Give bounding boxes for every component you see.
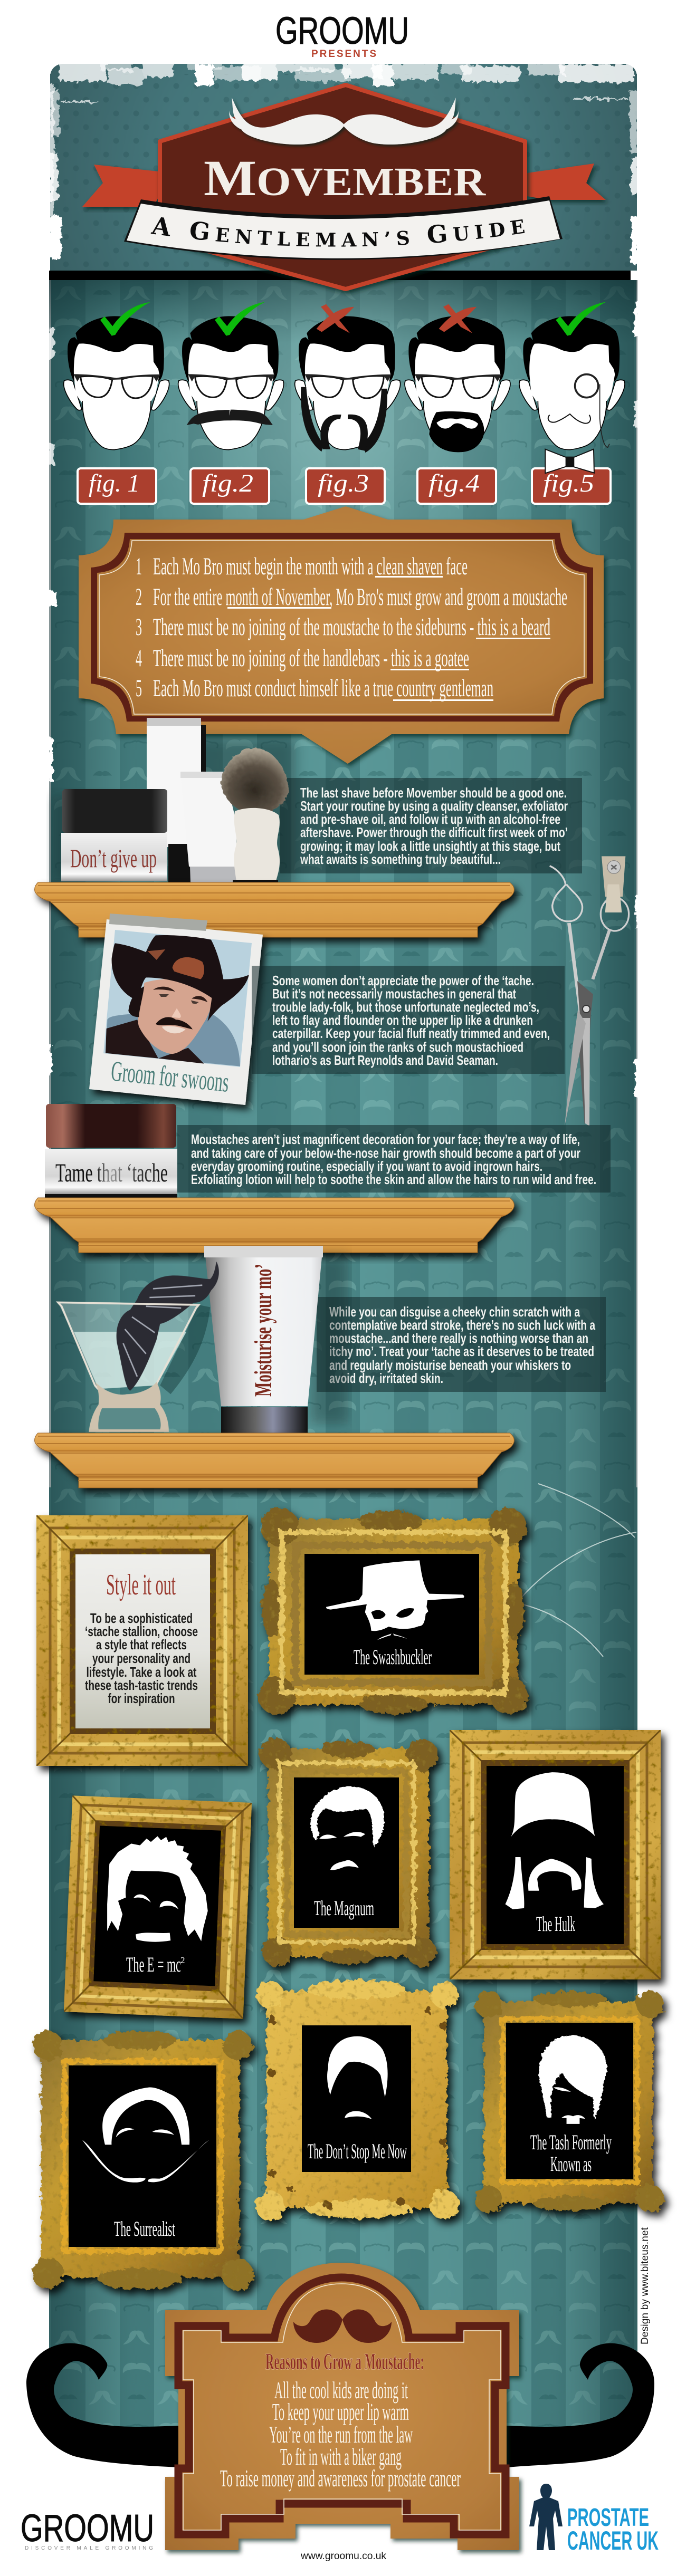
fig 4 face: beard [405,304,510,452]
frame: style it out [36,1515,248,1766]
text panel: tame that tache [177,1125,611,1193]
text panel: don't give up [280,778,582,873]
reasons list: To raise money and awareness for prostate cancer [220,2465,461,2492]
text panel: tame that tache: everyday grooming routine, especially if you want to avoid ingrown hairs. [191,1158,542,1174]
glass with moustache [58,1262,219,1432]
frame: the E = mc2 [64,1795,252,2019]
caption: Groom for swoons [110,1055,231,1098]
jar: tame that tache: Tame that ‘tache [55,1158,168,1187]
intro text: lifestyle. Take a look at [87,1664,197,1680]
shaving brush [220,748,289,883]
caption: Known as [550,2152,592,2176]
frame: the swashbuckler: The Swashbuckler [354,1645,432,1669]
credit: design by: Design by www.biteus.net [640,2227,651,2344]
text panel: groom for swoons: lothario’s as Burt Reynolds and David Seaman. [272,1052,498,1068]
rule 5 [136,675,493,702]
footer: Prostate Cancer UK wordmark [567,2504,659,2555]
black divider band [49,271,631,280]
fig 2 face: moustache [178,302,284,450]
polaroid: groom for swoons [89,914,263,1105]
footer: website: www.groomu.co.uk [300,2551,386,2562]
photo: man with cowboy hat and moustache [103,930,252,1067]
title badge [82,83,608,310]
moisturiser tube: Moisturise your mo’ [250,1264,277,1397]
shelf 1 [35,882,514,937]
text panel: moisturise: moustache...and there really is nothing worse than an [329,1330,588,1346]
fig.2 [190,468,269,504]
intro text: ‘stache stallion, choose [85,1623,198,1639]
bow tie on fig 5 [545,449,594,473]
intro text: To be a sophisticated [90,1610,193,1626]
text panel: moisturise: and regularly moisturise beneath your whiskers to [329,1357,571,1373]
rule 1 [136,553,468,580]
text panel: groom for swoons: trouble lady-folk, but those unfortunate neglected mo’s, [272,999,539,1015]
panel: the rules sign [79,506,604,764]
rule 2: 2 [136,583,142,611]
fig 5 face: monocle and curly moustache [519,302,625,450]
frame: the swashbuckler [258,1508,528,1715]
intro text [85,1610,198,1706]
silhouette [505,1772,604,1909]
scissors [550,866,629,1126]
moisturiser tube [204,1246,348,1433]
fig.3 [306,468,385,504]
fig 1 face: clean shaven [64,302,169,450]
rule 4 [136,645,469,672]
text panel: don't give up: growing; it may look a little unsightly at this stage, but [300,838,560,854]
fig.4: fig.4 [428,469,480,497]
fig.1: fig. 1 [89,469,140,497]
text panel: don't give up: The last shave before Movember should be a good one. [300,785,567,801]
white moustache [229,98,459,145]
header: presents: PRESENTS [311,49,376,60]
caption: The E = mc [126,1953,181,1976]
footer: Prostate Cancer UK figure [529,2484,563,2550]
silhouette [539,2035,607,2124]
frame: the don't stop me now: The Don’t Stop Me Now [308,2139,407,2163]
rule 5: 5 [136,675,142,702]
text panel: don't give up: Start your routine by using a quality cleanser, exfoliator [300,798,568,814]
heading: reasons: Reasons to Grow a Moustache: [265,2349,424,2375]
silhouette [310,1786,384,1870]
superscript: 2 [180,1955,185,1965]
panel: wallpaper background [49,64,637,2429]
badge: hexagon [160,85,525,289]
silhouette [326,1560,464,1640]
text panel: moisturise [317,1297,606,1392]
reasons list: You’re on the run from the law [269,2421,413,2448]
shelf 3 [35,1433,514,1488]
frame: the don't stop me now [255,1980,459,2221]
text panel: moisturise: avoid dry, irritated skin. [329,1370,443,1386]
tape [109,914,207,931]
silhouette [327,2036,388,2119]
text panel: groom for swoons: caterpillar. Keep your facial fluff neatly trimmed and even, [272,1025,550,1041]
reasons list: All the cool kids are doing it [274,2377,408,2404]
white tube [147,718,206,882]
fig 3 face: goatee and sideburns [295,304,401,453]
header: Groomu logo: GROOMU [275,10,409,52]
title: Movember: MOVEMBER [204,150,486,206]
intro text: a style that reflects [96,1637,187,1652]
text panel: groom for swoons: and you’ll soon join the ranks of such moustachioed [272,1039,523,1055]
text panel: groom for swoons: left to flay and flounder on the upper lip like a drunken [272,1012,533,1028]
jar: don't give up [61,789,167,881]
second tube [180,772,236,882]
text panel: don't give up: aftershave. Power through the difficult first week of mo’ [300,824,568,840]
large black moustache [26,2343,654,2467]
hanging wires [521,1484,636,1657]
frame: the hulk [450,1730,661,1979]
banner [124,196,563,260]
panel: reasons to grow a moustache sign [165,2263,519,2550]
rule 4: 4 [136,645,142,672]
ribbon: left tail [82,165,160,207]
grunge torn edges [47,62,640,1097]
silhouette [107,1836,208,1942]
frame: the tash formerly known as [475,1991,664,2213]
reasons list [220,2377,461,2492]
figures row [64,302,625,453]
brown moustache icon [293,2310,392,2343]
text panel: groom for swoons: But it’s not necessarily moustaches in general that [272,986,516,1002]
heading: style it out: Style it out [106,1569,176,1601]
intro text: these tash-tastic trends [85,1677,198,1693]
caption: The Magnum [314,1896,374,1920]
shelf 2 [35,1198,514,1253]
jar: tame that tache [45,1104,177,1198]
jar: don't give up: Don’t give up [70,843,157,873]
text panel: moisturise: itchy mo’. Treat your ‘tache as it deserves to be treated [329,1343,594,1359]
rule 1: 1 [136,553,142,580]
text panel: don't give up: and pre-shave oil, and follow it up with an alcohol-free [300,811,560,827]
fig labels [78,468,611,504]
text panel: don't give up: what awaits is something truly beautiful... [300,851,501,867]
ribbon: right tail [527,164,606,200]
text panel: groom for swoons: Some women don’t appreciate the power of the ‘tache. [272,973,534,988]
footer: Groomu logo: GROOMU [21,2507,154,2550]
caption [530,2130,612,2176]
text panel: moisturise: While you can disguise a cheeky chin scratch with a [329,1304,580,1320]
fig.5 [532,468,611,504]
fig.1 [78,468,156,504]
intro text: for inspiration [108,1690,175,1706]
wall hook [602,856,625,912]
text panel: groom for swoons [252,966,565,1074]
fig.3: fig.3 [318,469,369,497]
reasons list: To keep your upper lip warm [272,2399,409,2425]
subtitle: A Gentleman's Guide: A GENTLEMAN’S GUIDE [151,217,525,247]
rule 3: 3 [136,613,142,641]
frame: the hulk: The Hulk [536,1912,575,1936]
silhouette [82,2088,209,2183]
fig.4 [417,468,496,504]
intro text: your personality and [92,1650,190,1666]
shelf objects: grooming products [53,718,296,886]
fig.2: fig.2 [202,469,253,497]
frame: the magnum [260,1738,438,1966]
reasons list: To fit in with a biker gang [280,2444,402,2470]
caption: The Surrealist [114,2217,175,2241]
footer: Groomu logo: DISCOVER MALE GROOMING [25,2545,153,2551]
text panel: moisturise: contemplative beard stroke, there’s no such luck with a [329,1317,595,1333]
frame: the surrealist [32,2031,253,2290]
fig.5: fig.5 [543,469,594,497]
